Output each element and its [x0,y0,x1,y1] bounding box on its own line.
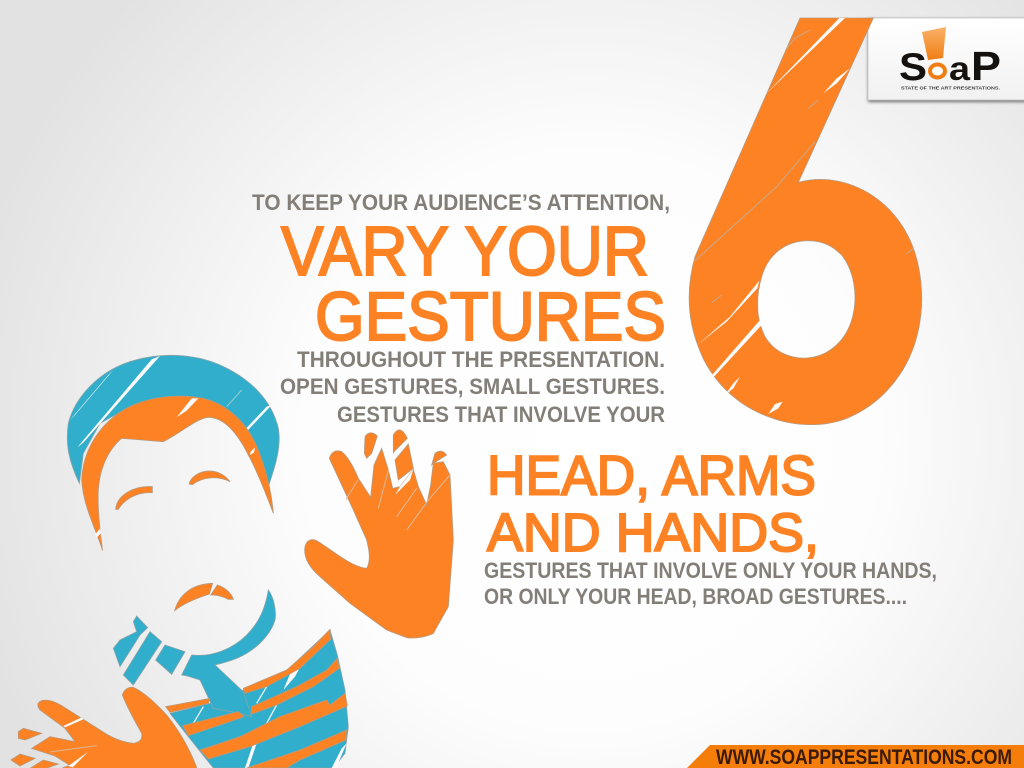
heading: head, arms and hands: HEAD, ARMS [487,444,816,506]
logo wordmark: S [899,46,927,89]
logo tagline: STATE OF THE ART PRESENTATIONS. [901,86,1000,92]
moustache [175,583,233,611]
numeral six [689,18,922,425]
heading: vary your gestures: GESTURES [315,278,666,355]
hair [82,396,273,551]
illustration: presenter head [67,355,279,551]
logo wordmark: a [949,50,971,87]
body text upper: THROUGHOUT THE PRESENTATION. [297,347,665,372]
fingers [11,728,75,768]
illustration: presenter body [113,583,348,768]
illustration: lower left hand [11,687,197,768]
heading: head, arms and hands [487,444,819,563]
scratches on six [695,18,913,414]
footer banner [687,745,1024,768]
heading: vary your gestures [281,212,666,355]
shirt [170,630,348,768]
logo wordmark: P [971,43,1001,89]
collar and tie [113,590,275,717]
body text upper: OPEN GESTURES, SMALL GESTURES. [280,374,665,399]
finger tips [364,430,447,480]
body text upper: GESTURES THAT INVOLVE YOUR [337,402,665,427]
logo wordmark [899,43,1001,89]
shirt stripes [166,629,347,768]
heading: vary your gestures: VARY YOUR [281,212,649,290]
intro text: TO KEEP YOUR AUDIENCE’S ATTENTION, [252,190,670,215]
body text upper [280,347,665,427]
logo exclamation mark [922,27,946,60]
body text lower [484,558,937,609]
hand scratches [346,469,450,530]
hat [67,355,279,487]
body text lower: GESTURES THAT INVOLVE ONLY YOUR HANDS, [484,558,937,583]
body text lower: OR ONLY YOUR HEAD, BROAD GESTURES.... [484,584,907,609]
illustration: raised right hand [305,430,453,638]
logo card [868,18,1024,102]
eyebrows [116,471,230,509]
heading: head, arms and hands: AND HANDS, [487,503,819,563]
